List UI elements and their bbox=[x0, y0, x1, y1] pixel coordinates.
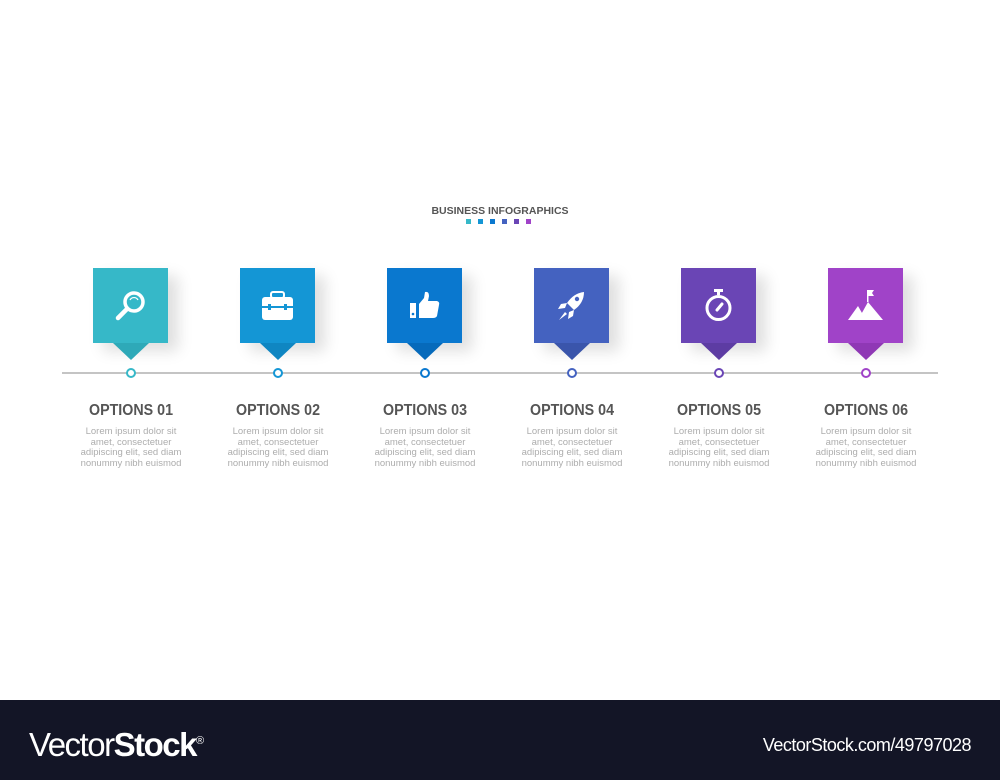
text: nonummy nibh euismod bbox=[522, 458, 622, 469]
text: nonummy nibh euismod bbox=[228, 458, 328, 469]
heading: OPTIONS 06 bbox=[824, 402, 908, 419]
text: amet, consectetuer bbox=[679, 437, 759, 448]
step 06 bbox=[816, 268, 918, 469]
text bbox=[816, 426, 916, 469]
footer url: VectorStock.com/49797028 bbox=[763, 735, 971, 755]
text: Lorem ipsum dolor sit bbox=[674, 426, 764, 437]
text bbox=[81, 426, 181, 469]
text: Lorem ipsum dolor sit bbox=[380, 426, 470, 437]
heading: OPTIONS 04 bbox=[530, 402, 614, 419]
text: amet, consectetuer bbox=[385, 437, 465, 448]
text: nonummy nibh euismod bbox=[669, 458, 769, 469]
title color dots bbox=[466, 219, 531, 224]
timeline line bbox=[62, 372, 938, 374]
text: adipiscing elit, sed diam bbox=[81, 447, 181, 458]
text bbox=[375, 426, 475, 469]
title: BUSINESS INFOGRAPHICS bbox=[431, 205, 569, 217]
text bbox=[228, 426, 328, 469]
heading: OPTIONS 01 bbox=[89, 402, 173, 419]
text: Lorem ipsum dolor sit bbox=[86, 426, 176, 437]
heading: OPTIONS 05 bbox=[677, 402, 761, 419]
text: Lorem ipsum dolor sit bbox=[527, 426, 617, 437]
heading: OPTIONS 03 bbox=[383, 402, 467, 419]
text: adipiscing elit, sed diam bbox=[375, 447, 475, 458]
step 05 bbox=[669, 268, 770, 469]
text: Lorem ipsum dolor sit bbox=[821, 426, 911, 437]
footer logo: VectorStock® bbox=[29, 726, 203, 763]
step 02 bbox=[228, 268, 330, 469]
box with thumbs up icon bbox=[387, 268, 462, 343]
text: adipiscing elit, sed diam bbox=[816, 447, 916, 458]
step 04 bbox=[522, 268, 624, 469]
text: amet, consectetuer bbox=[91, 437, 171, 448]
text bbox=[522, 426, 622, 469]
box with stopwatch icon bbox=[681, 268, 756, 343]
box with rocket icon bbox=[534, 268, 609, 343]
heading: OPTIONS 02 bbox=[236, 402, 320, 419]
text: nonummy nibh euismod bbox=[375, 458, 475, 469]
text: nonummy nibh euismod bbox=[81, 458, 181, 469]
footer bar bbox=[0, 700, 1000, 780]
text: nonummy nibh euismod bbox=[816, 458, 916, 469]
text: adipiscing elit, sed diam bbox=[228, 447, 328, 458]
box with mountain flag icon bbox=[828, 268, 903, 343]
box with briefcase icon bbox=[240, 268, 315, 343]
text: amet, consectetuer bbox=[238, 437, 318, 448]
text bbox=[669, 426, 769, 469]
text: amet, consectetuer bbox=[826, 437, 906, 448]
text: adipiscing elit, sed diam bbox=[669, 447, 769, 458]
text: amet, consectetuer bbox=[532, 437, 612, 448]
step 03 bbox=[375, 268, 476, 469]
box with search icon bbox=[93, 268, 168, 343]
step 01 bbox=[81, 268, 182, 469]
text: Lorem ipsum dolor sit bbox=[233, 426, 323, 437]
text: adipiscing elit, sed diam bbox=[522, 447, 622, 458]
